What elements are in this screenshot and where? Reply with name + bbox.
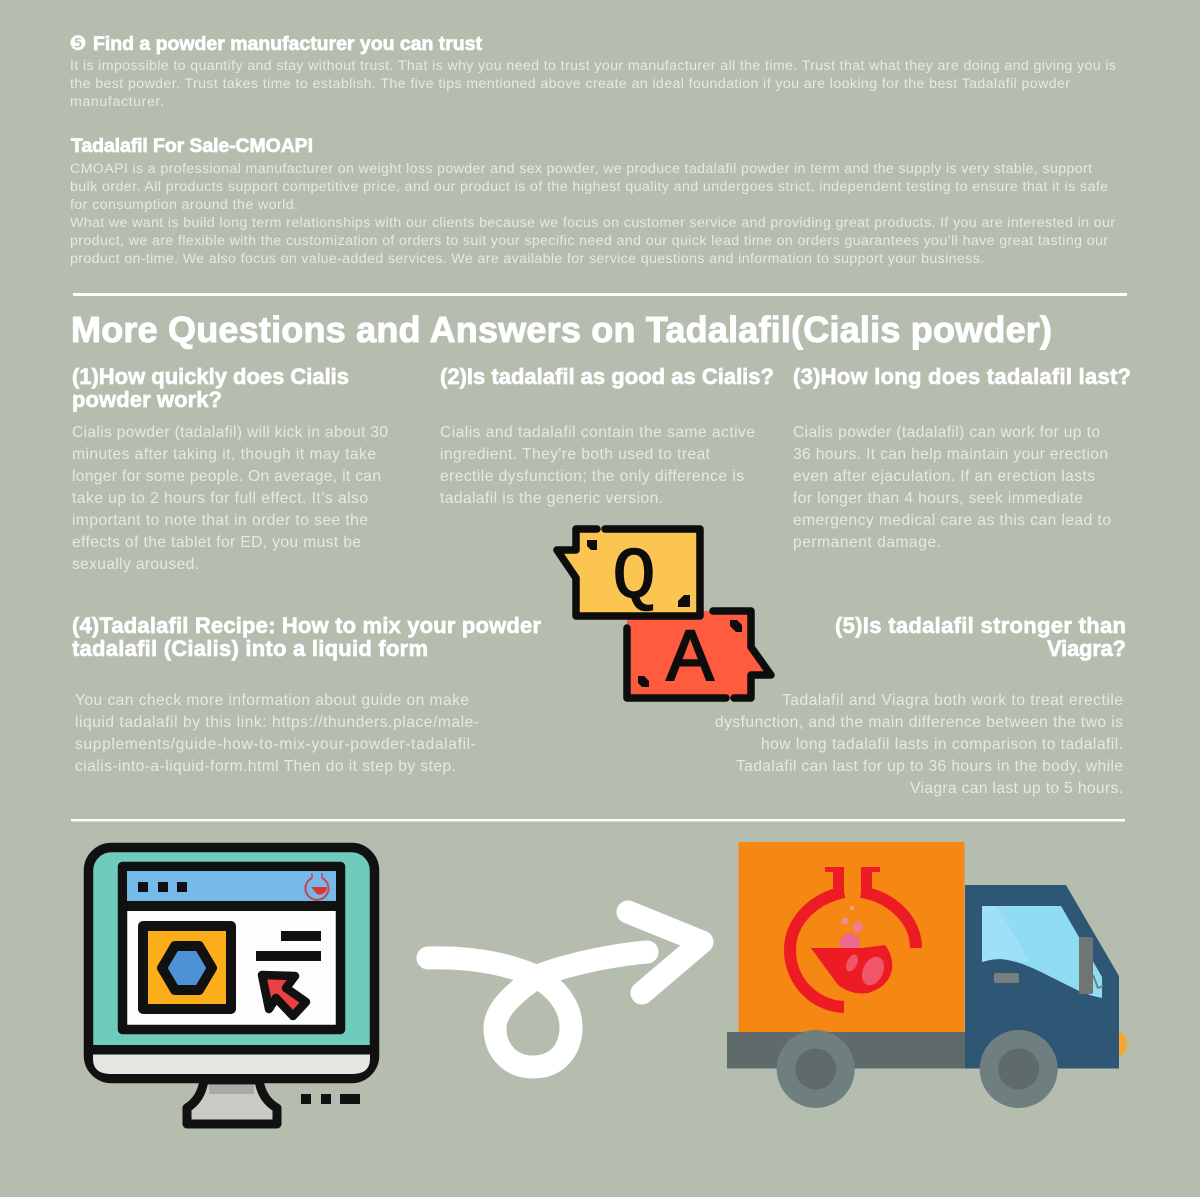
body text: trust paragraph: manufacturer. bbox=[70, 94, 164, 110]
small flask logo bbox=[306, 873, 329, 900]
body text: CMOAPI description: CMOAPI is a professional manufacturer on weight loss powder and sex powder, we produce tadalafil powder in term and the supply is very stable, support bbox=[70, 161, 1092, 177]
question 1 answer: sexually aroused. bbox=[72, 556, 199, 573]
question 5 answer: Viagra can last up to 5 hours. bbox=[910, 780, 1123, 797]
cargo box bbox=[738, 842, 964, 1032]
arrow: looping white arrow bbox=[428, 912, 702, 1067]
question 2 answer bbox=[440, 424, 755, 507]
body text: trust paragraph: the best powder. Trust takes time to establish. The five tips mentioned above create an ideal foundation if you are looking for the best Tadalafil powder bbox=[70, 76, 1070, 92]
cursor arrow bbox=[262, 975, 306, 1016]
question 5 heading: Viagra? bbox=[1047, 636, 1126, 661]
question 5 answer: Tadalafil can last for up to 36 hours in the body, while bbox=[736, 758, 1123, 775]
panel: question 4 bbox=[72, 613, 541, 775]
question 1 answer: effects of the tablet for ED, you must be bbox=[72, 534, 361, 551]
icon: desktop computer with shop page bbox=[88, 848, 374, 1124]
body text: CMOAPI description: product on-time. We also focus on value-added services. We are available for service questions and information to support your business. bbox=[70, 251, 984, 267]
heading: find a powder manufacturer you can trust: ❺ bbox=[69, 31, 87, 55]
question 2 answer: tadalafil is the generic version. bbox=[440, 490, 663, 507]
body text: CMOAPI description: What we want is build long term relationships with our clients because we focus on customer service and providing great products. If you are interested in our bbox=[70, 215, 1115, 231]
question 4 answer bbox=[75, 692, 479, 775]
question 3 answer: permanent damage. bbox=[793, 534, 941, 551]
question 1 answer: Cialis powder (tadalafil) will kick in about 30 bbox=[72, 424, 388, 441]
panel: question 1 bbox=[72, 364, 388, 573]
question 1 heading: powder work? bbox=[72, 387, 222, 412]
panel: question 3 bbox=[793, 364, 1131, 551]
icon: A bubble bbox=[627, 611, 771, 698]
body text: trust paragraph: It is impossible to quantify and stay without trust. That is why you need to trust your manufacturer all the time. Trust that what they are doing and giving you is bbox=[70, 58, 1116, 74]
question 3 answer: even after ejaculation. If an erection lasts bbox=[793, 468, 1095, 485]
question 4 heading: tadalafil (Cialis) into a liquid form bbox=[72, 636, 428, 661]
question 4 answer: liquid tadalafil by this link: https://thunders.place/male- bbox=[75, 714, 479, 731]
question 5 answer: Tadalafil and Viagra both work to treat erectile bbox=[782, 692, 1123, 709]
rear wheel bbox=[777, 1030, 855, 1108]
question 5 heading bbox=[835, 613, 1126, 661]
question 4 answer: You can check more information about guide on make bbox=[75, 692, 469, 709]
question 4 answer: cialis-into-a-liquid-form.html Then do it step by step. bbox=[75, 758, 456, 775]
question 5 heading: (5)Is tadalafil stronger than bbox=[835, 613, 1126, 638]
question 3 answer: 36 hours. It can help maintain your erection bbox=[793, 446, 1108, 463]
question 2 answer: ingredient. They're both used to treat bbox=[440, 446, 711, 463]
question 1 answer: minutes after taking it, though it may take bbox=[72, 446, 376, 463]
flask logo bbox=[790, 867, 916, 1007]
question 3 heading: (3)How long does tadalafil last? bbox=[793, 364, 1131, 389]
question 2 answer: erectile dysfunction; the only difference is bbox=[440, 468, 744, 485]
body text: CMOAPI description: for consumption around the world. bbox=[70, 197, 298, 213]
icon: A bubble: A bbox=[666, 617, 714, 696]
front wheel bbox=[980, 1030, 1058, 1108]
question 2 answer: Cialis and tadalafil contain the same active bbox=[440, 424, 755, 441]
title: more questions and answers: More Questions and Answers on Tadalafil(Cialis powder) bbox=[71, 309, 1052, 350]
text block: find a powder manufacturer bbox=[69, 31, 1116, 110]
question 4 answer: supplements/guide-how-to-mix-your-powder-tadalafil- bbox=[75, 736, 476, 753]
question 3 answer bbox=[793, 424, 1111, 551]
monitor stand bbox=[187, 1080, 277, 1124]
question 3 answer: for longer than 4 hours, seek immediate bbox=[793, 490, 1083, 507]
icon: Q bubble: Q bbox=[612, 537, 656, 619]
mirror bbox=[1079, 937, 1103, 994]
question 4 heading: (4)Tadalafil Recipe: How to mix your powder bbox=[72, 613, 541, 638]
question 1 heading bbox=[72, 364, 349, 412]
question 4 heading bbox=[72, 613, 541, 661]
text block: tadalafil for sale bbox=[70, 135, 1115, 267]
body text: CMOAPI description: product, we are flexible with the customization of orders to suit your specific need and our quick lead time on orders guarantees you’ll have great tasting our bbox=[70, 233, 1108, 249]
cab bbox=[965, 885, 1119, 1068]
browser window bbox=[122, 866, 340, 1030]
question 5 answer: how long tadalafil lasts in comparison to tadalafil. bbox=[761, 736, 1123, 753]
door handle bbox=[994, 973, 1019, 983]
question 5 answer bbox=[715, 692, 1123, 797]
headlight bbox=[1111, 1032, 1127, 1056]
chassis bbox=[727, 1032, 965, 1068]
question 1 heading: (1)How quickly does Cialis bbox=[72, 364, 349, 389]
icon: Q bubble bbox=[557, 529, 700, 619]
question 1 answer bbox=[72, 424, 388, 573]
product tile bbox=[143, 926, 231, 1009]
panel: question 2 bbox=[440, 364, 774, 507]
windshield bbox=[982, 906, 1102, 998]
panel: question 5 bbox=[715, 613, 1126, 797]
icon: delivery truck bbox=[727, 842, 1127, 1108]
body text: CMOAPI description: bulk order. All products support competitive price, and our product is of the highest quality and undergoes strict, independent testing to ensure that it is safe bbox=[70, 179, 1108, 195]
question 5 answer: dysfunction, and the main difference between the two is bbox=[715, 714, 1123, 731]
question 1 answer: longer for some people. On average, it can bbox=[72, 468, 381, 485]
question 3 answer: emergency medical care as this can lead to bbox=[793, 512, 1111, 529]
monitor body bbox=[88, 848, 374, 1078]
question 1 answer: take up to 2 hours for full effect. It’s also bbox=[72, 490, 368, 507]
body text: trust paragraph bbox=[70, 58, 1116, 110]
icon: Q and A speech bubbles bbox=[557, 529, 771, 698]
heading: find a powder manufacturer you can trust: Find a powder manufacturer you can trust bbox=[93, 33, 482, 55]
question 1 answer: important to note that in order to see the bbox=[72, 512, 368, 529]
question 3 answer: Cialis powder (tadalafil) can work for up to bbox=[793, 424, 1100, 441]
body text: CMOAPI description bbox=[70, 161, 1115, 267]
heading: tadalafil for sale: Tadalafil For Sale-CMOAPI bbox=[71, 135, 313, 157]
question 2 heading: (2)Is tadalafil as good as Cialis? bbox=[440, 364, 774, 389]
